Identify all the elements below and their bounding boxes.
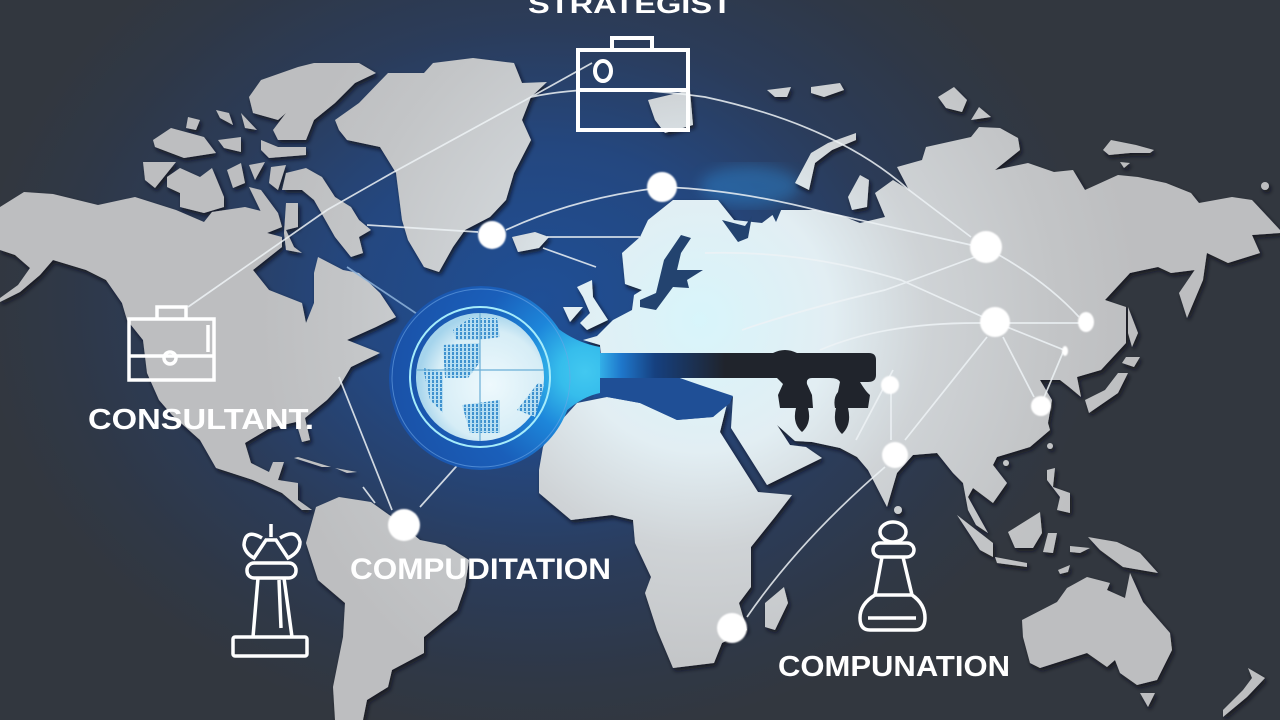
- uk and ireland: [577, 280, 608, 330]
- north america: [0, 192, 396, 510]
- network nodes: [388, 172, 1094, 643]
- key: globe bow with shaft and teeth: [389, 286, 876, 470]
- new zealand: [1223, 668, 1265, 717]
- arctic islands: [143, 63, 376, 257]
- southeast asia islands: [957, 468, 1158, 574]
- svalbard beneath briefcase: [648, 90, 693, 133]
- icon: briefcase top: [578, 38, 688, 130]
- blue sparkle above europe: [700, 166, 800, 206]
- connection lines: [188, 63, 1080, 617]
- icon: chess pawn: [860, 522, 925, 630]
- africa: [539, 397, 792, 668]
- label: computation: COMPUDITATION: [350, 553, 611, 586]
- iceland: [512, 232, 549, 252]
- icon: briefcase left: [129, 307, 214, 380]
- globe meridian: [416, 313, 544, 441]
- mediterranean: [593, 377, 733, 420]
- key neck: [530, 300, 600, 455]
- south america: [306, 497, 469, 720]
- glowing key bow: [389, 286, 573, 470]
- tasmania: [1140, 693, 1155, 707]
- arctic russia islands: [767, 83, 1269, 210]
- greenland: [335, 58, 547, 272]
- caribbean: [294, 457, 331, 467]
- sri lanka and taiwan: [894, 506, 902, 514]
- australia: [1022, 573, 1172, 685]
- sakhalin: [1179, 252, 1207, 318]
- icon: chess king: [233, 524, 307, 656]
- globe: [416, 313, 544, 441]
- label: compunation: COMPUNATION: [778, 651, 1010, 683]
- eurasia: [583, 127, 1280, 533]
- japan: [1122, 357, 1140, 367]
- label: consultant: CONSULTANT.: [88, 404, 314, 436]
- inland seas: [640, 208, 782, 310]
- bow outer ring line: [392, 289, 570, 467]
- madagascar: [765, 587, 788, 630]
- key blade with teeth: [720, 350, 876, 434]
- globe dotted land: [423, 318, 544, 433]
- globe outer ring: [410, 307, 550, 447]
- key shaft: [598, 353, 725, 378]
